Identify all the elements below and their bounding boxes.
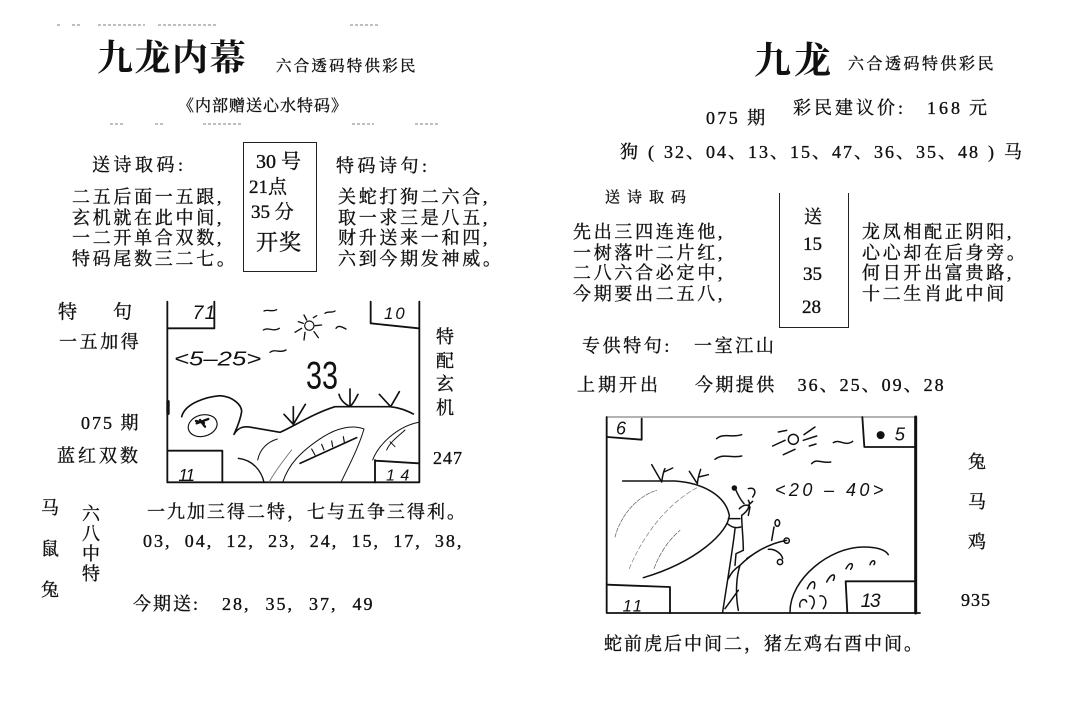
draw label: 开奖: [256, 230, 302, 255]
label: zodiac trio: 鼠: [41, 539, 59, 559]
number: 10: 10: [384, 304, 405, 323]
hand-drawn puzzle picture, left: [166, 300, 420, 485]
number: 13: 13: [861, 591, 881, 612]
label: issue 075: 075 期: [81, 413, 140, 433]
text: closing rhyme: 蛇前虎后中间二，猪左鸡右酉中间。: [604, 634, 924, 654]
heading: special code poem: 特码诗句:: [336, 156, 431, 176]
text block: right poem: 何日开出富贵路,: [862, 263, 1014, 283]
text block: right poem: 龙凤相配正阴阳,: [862, 222, 1014, 242]
numbers: code list: 03, 04, 12, 23, 24, 15, 17, 38,: [143, 531, 463, 551]
text: special phrase: 专供特句: 一室江山: [582, 336, 776, 356]
sun and clouds: [263, 310, 346, 352]
label: add one five: 一五加得: [59, 332, 141, 352]
number: 6: 6: [616, 419, 627, 439]
number: 11: 11: [178, 465, 195, 485]
number: 14: 14: [386, 467, 409, 484]
text block: left poem: 一二开单合双数,: [72, 228, 224, 248]
text: this issue numbers: 今期提供 36、25、09、28: [695, 375, 946, 395]
gift label: 送: [804, 207, 822, 227]
label: special mystery vertical: 玄: [436, 374, 454, 394]
heading: internal code gift: 《内部赠送心水特码》: [178, 98, 348, 115]
hill and bird outline: [182, 389, 413, 440]
label: special mystery vertical: [436, 327, 454, 418]
text block: left poem: 先出三四连连他,: [573, 222, 725, 242]
label: special mystery vertical: 特: [436, 327, 454, 347]
number: 11: 11: [623, 596, 642, 615]
title: 九龙内幕: 九龙内幕: [97, 38, 247, 78]
draw minute: 35 分: [251, 202, 294, 223]
text block: left poem: 今期要出二五八,: [573, 284, 725, 304]
number: 71: 71: [193, 303, 215, 324]
subtitle: lottery tagline: 六合透码特供彩民: [276, 58, 418, 75]
label: six eight vertical: 八: [82, 524, 100, 544]
label: zodiac trio vertical: 马: [968, 492, 986, 512]
text block: right poem: 六到今期发神威。: [338, 248, 504, 268]
label: six eight vertical: 六: [82, 504, 100, 524]
text: this issue gift: 今期送: 28, 35, 37, 49: [133, 594, 375, 614]
handwritten numbers: [174, 303, 409, 485]
panel: left sheet 九龙内幕: [41, 38, 504, 614]
heading: poem for codes: 送诗取码:: [92, 155, 187, 175]
rock shapes: [238, 422, 418, 482]
range: 5-25: <5–25>: [174, 348, 261, 371]
label: six eight vertical: [82, 504, 100, 584]
number 15: 15: [803, 234, 822, 255]
text block: right poem: 取一求三是八五,: [338, 208, 490, 228]
label: last issue: 上期开出: [577, 375, 661, 395]
text block: right poem: [338, 187, 504, 268]
heading: poem for codes: 送诗取码: [605, 190, 693, 206]
label: special mystery vertical: 配: [436, 351, 454, 371]
text block: left poem: 特码尾数三二七。: [72, 248, 238, 268]
text block: left poem: 玄机就在此中间,: [72, 208, 224, 228]
sun and clouds: [715, 427, 853, 464]
title: 九龙: 九龙: [754, 41, 834, 82]
number 28: 28: [802, 297, 821, 318]
text block: right poem: [862, 222, 1028, 304]
text block: left poem: 二五后面一五跟,: [72, 187, 224, 207]
text block: left poem: [72, 187, 238, 268]
label: zodiac trio: 兔: [41, 580, 59, 600]
text block: right poem: 心心却在后身旁。: [862, 242, 1028, 262]
label: zodiac trio vertical: [968, 452, 986, 552]
hand-drawn puzzle picture, right: [606, 416, 921, 615]
label: six eight vertical: 中: [82, 544, 100, 564]
picture frame: [167, 302, 419, 482]
picture frame: [607, 417, 920, 613]
number: 935: 935: [961, 590, 991, 610]
label: zodiac trio: 马: [41, 498, 59, 518]
text block: right poem: 关蛇打狗二六合,: [338, 187, 490, 207]
draw date: 30 号: [256, 151, 301, 173]
text block: left poem: [573, 222, 725, 304]
text block: right poem: 十二生肖此中间: [862, 284, 1007, 304]
label: issue 075: 075 期: [706, 108, 768, 128]
bush: [790, 547, 888, 612]
draw hour: 21点: [249, 177, 287, 198]
hill and plants: [615, 465, 729, 578]
handwritten numbers: [616, 419, 906, 615]
text: suggested price: 彩民建议价: 168 元: [793, 98, 990, 118]
text block: right poem: 财升送来一和四,: [338, 228, 490, 248]
number 35: 35: [803, 264, 822, 285]
label: special mystery vertical: 机: [436, 398, 454, 418]
text: rhyme line: 一九加三得二特，七与五争三得利。: [147, 502, 467, 522]
number: 33: 33: [306, 353, 338, 397]
label: zodiac trio vertical: 鸡: [968, 532, 986, 552]
subtitle: lottery tagline: 六合透码特供彩民: [848, 56, 996, 73]
label: blue red even: 蓝红双数: [57, 446, 141, 466]
panel: draw time box: [243, 142, 317, 272]
label: special phrase: 特 句: [58, 302, 132, 323]
text block: left poem: 二八六合必定中,: [573, 263, 725, 283]
text block: left poem: 一树落叶二片红,: [573, 242, 725, 262]
text: dog-horse code list: 狗 ( 32、04、13、15、47、36、35、48 ) 马: [620, 142, 1024, 162]
panel: gift numbers box: [779, 193, 849, 328]
label: zodiac trio vertical: 兔: [968, 452, 986, 472]
panel: right sheet 九龙: [573, 41, 1028, 654]
number: 247: 247: [433, 448, 463, 468]
number: 05: ●5: [875, 424, 906, 445]
tree: [723, 486, 789, 612]
range: 20-40: <20 – 40>: [775, 480, 883, 500]
label: zodiac trio: [41, 498, 59, 600]
label: six eight vertical: 特: [82, 564, 100, 584]
